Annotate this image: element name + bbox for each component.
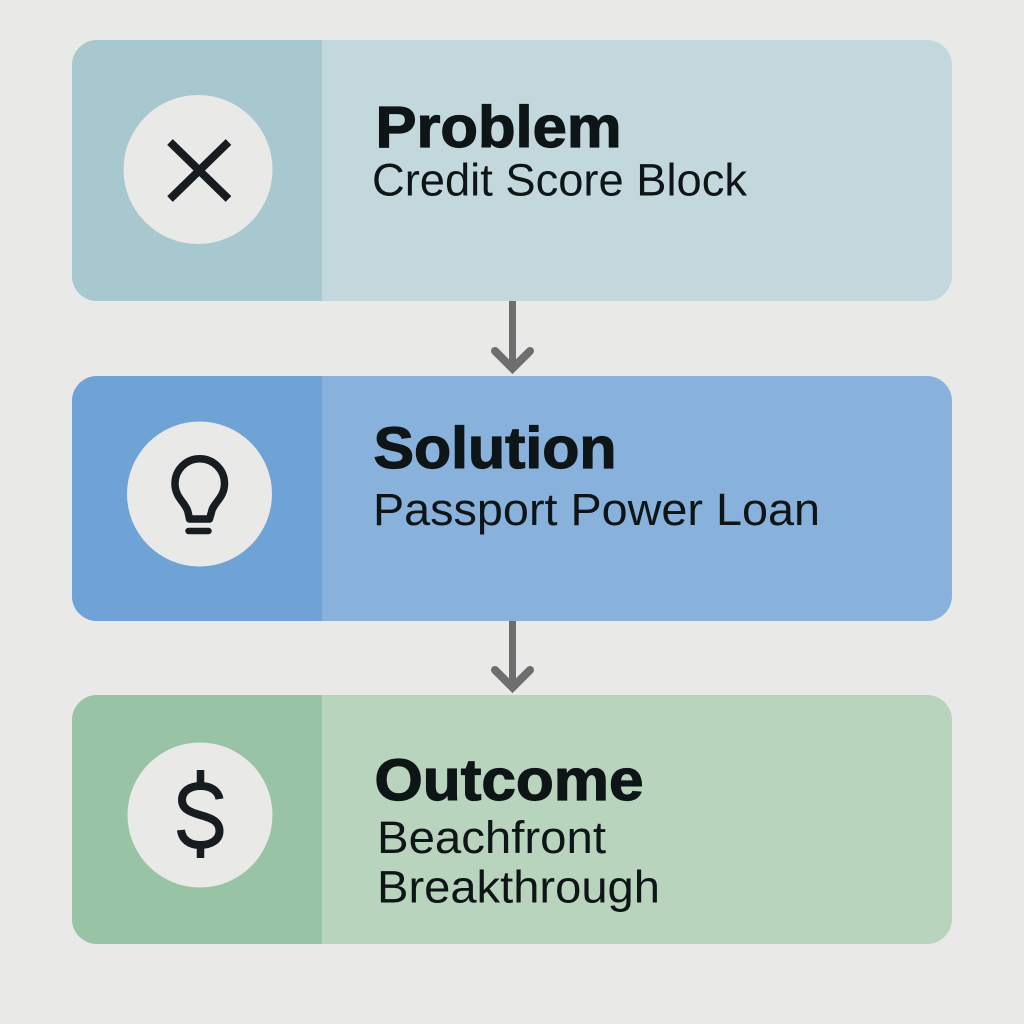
text: Credit Score Block: Credit Score Block bbox=[372, 154, 747, 206]
outcome card background bbox=[72, 695, 952, 944]
outcome icon column bbox=[72, 695, 322, 944]
text: Beachfront Breakthrough: Breakthrough bbox=[377, 862, 660, 912]
text: Beachfront Breakthrough bbox=[377, 812, 660, 912]
icon: light bulb in circle bbox=[127, 422, 272, 566]
heading: Problem: Problem bbox=[376, 95, 622, 160]
heading: Outcome: Outcome bbox=[374, 748, 644, 813]
text: Beachfront Breakthrough: Beachfront bbox=[377, 812, 607, 863]
arrow: problem to solution bbox=[495, 301, 530, 368]
panel: outcome bbox=[72, 695, 952, 944]
icon: dollar in circle bbox=[128, 742, 272, 888]
problem card background bbox=[72, 40, 952, 301]
panel: problem bbox=[72, 40, 952, 301]
arrow: solution to outcome bbox=[495, 621, 530, 688]
solution icon column bbox=[72, 376, 322, 621]
panel: solution bbox=[72, 376, 952, 621]
icon: cross in circle bbox=[124, 95, 272, 244]
solution card background bbox=[72, 376, 952, 621]
heading: Solution: Solution bbox=[374, 416, 616, 481]
text: Passport Power Loan: Passport Power Loan bbox=[373, 484, 820, 535]
problem icon column bbox=[72, 40, 322, 301]
